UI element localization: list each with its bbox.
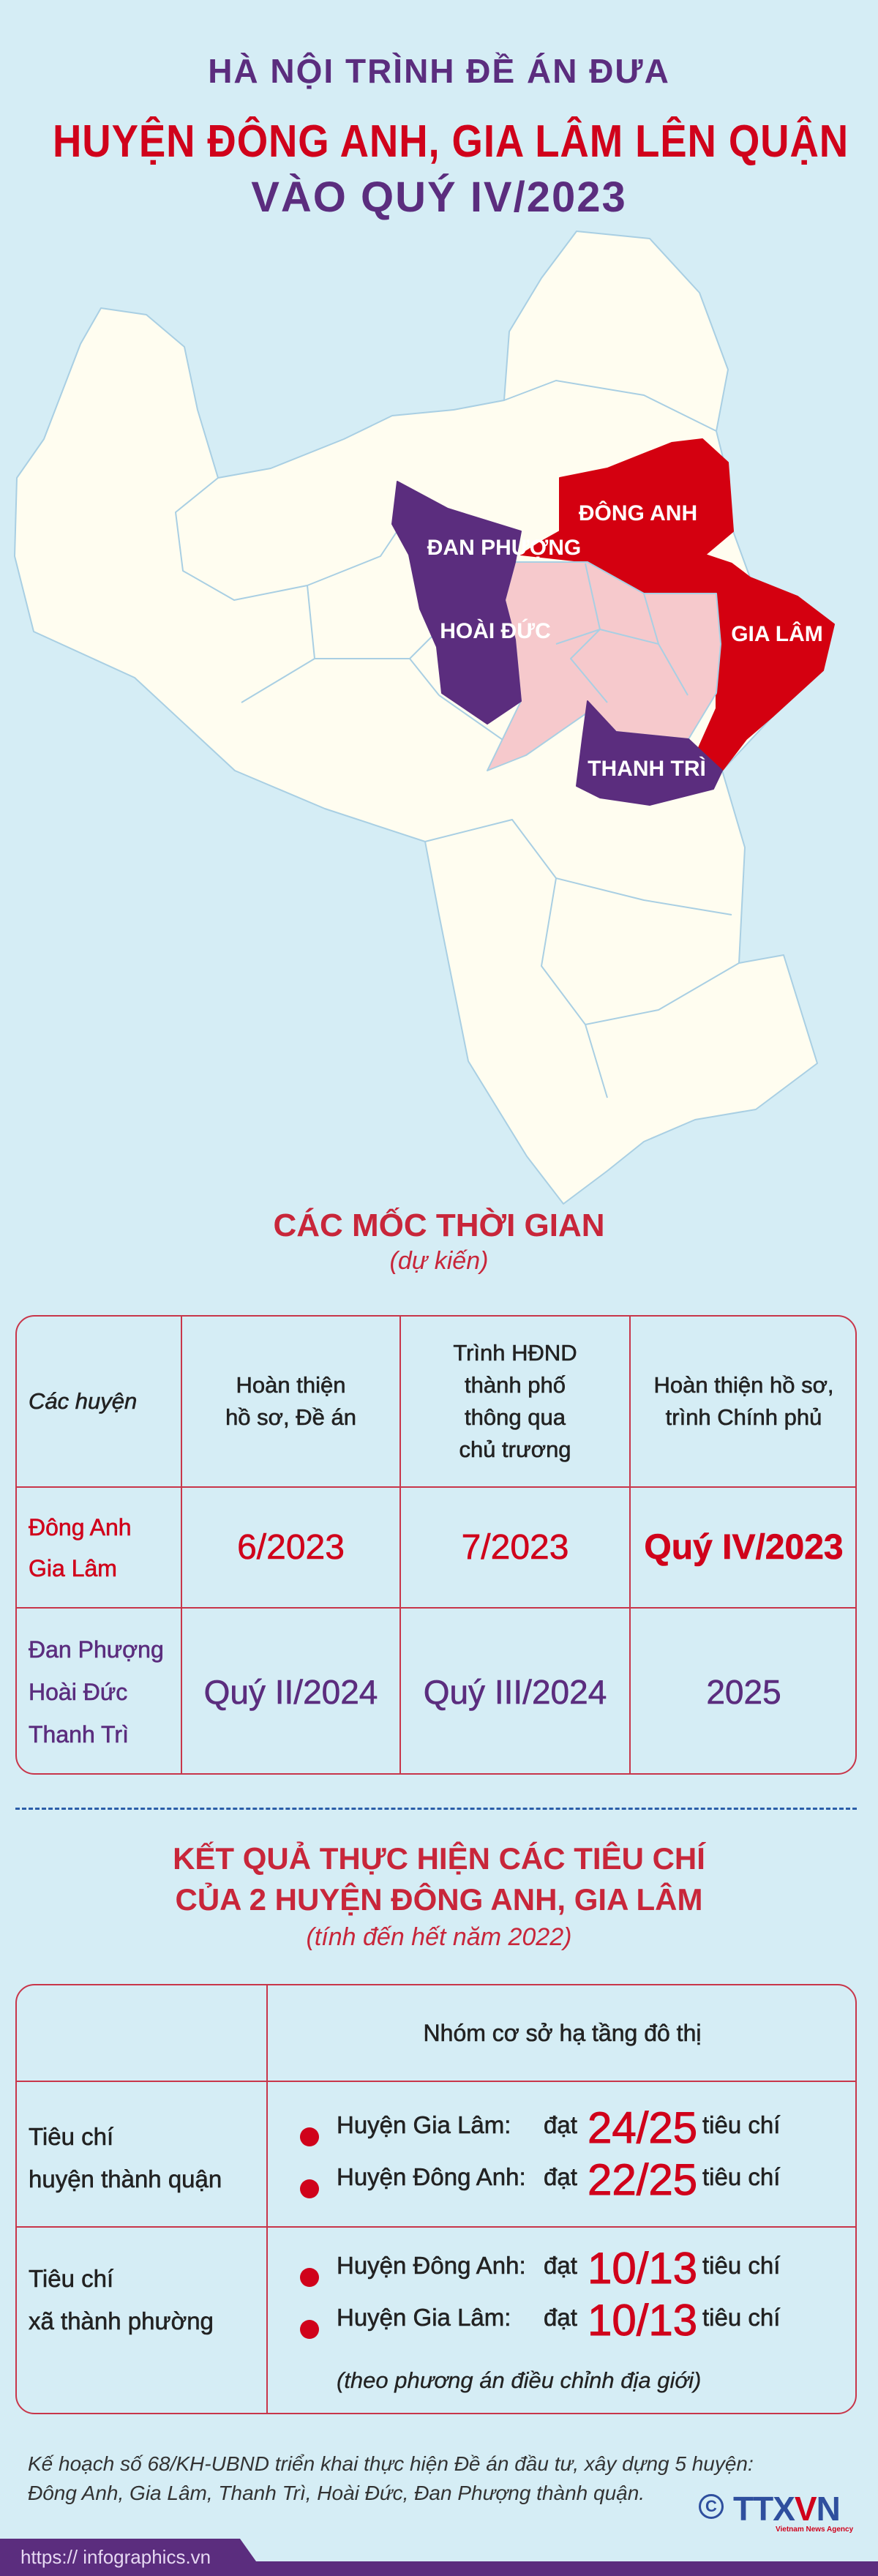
map labels: ĐÔNG ANH [579, 501, 697, 525]
title line 3: VÀO QUÝ IV/2023 [251, 173, 627, 221]
table: criteria results: đạt [544, 2111, 577, 2138]
table: milestones: chủ trương [459, 1437, 571, 1462]
map: inner city (pink) [487, 562, 721, 771]
logo: TTXVN: Vietnam News Agency [776, 2526, 853, 2534]
table: milestones: Hoàn thiện [236, 1372, 345, 1398]
logo: TTXVN: TTXVN [733, 2490, 840, 2528]
title line 2: HUYỆN ĐÔNG ANH, GIA LÂM LÊN QUẬN [53, 116, 849, 167]
table: milestones [15, 1315, 857, 1775]
table: criteria results: 24/25 [588, 2103, 697, 2152]
table: criteria results: 10/13 [588, 2244, 697, 2293]
footer bar [0, 2539, 878, 2576]
map [14, 231, 835, 1205]
title line 1: HÀ NỘI TRÌNH ĐỀ ÁN ĐƯA [208, 52, 670, 90]
table: criteria results: Huyện Đông Anh: [337, 2252, 526, 2279]
table: milestones: Quý III/2024 [424, 1673, 607, 1711]
row: commune criteria: xã thành phường [29, 2307, 214, 2334]
table: criteria results: đạt [544, 2252, 577, 2279]
table: milestones: thành phố [465, 1372, 566, 1398]
heading: results: CỦA 2 HUYỆN ĐÔNG ANH, GIA LÂM [175, 1882, 702, 1917]
table: criteria results: đạt [544, 2304, 577, 2331]
row: Dan Phuong, Hoai Duc, Thanh Tri: Đan Phượng [29, 1636, 164, 1663]
table: milestones: Hoàn thiện hồ sơ, [653, 1372, 834, 1398]
title [53, 52, 849, 221]
logo: TTXVN: C [705, 2497, 717, 2515]
row: district criteria [29, 2123, 222, 2193]
table: criteria results: tiêu chí [702, 2304, 780, 2331]
table: criteria results: Huyện Đông Anh: [337, 2163, 526, 2190]
table: milestones: 6/2023 [237, 1528, 345, 1567]
heading: milestones [273, 1208, 605, 1275]
map labels: HOÀI ĐỨC [440, 618, 551, 643]
table: milestones: hồ sơ, Đề án [225, 1404, 356, 1430]
table: milestones: Quý IV/2023 [644, 1528, 844, 1567]
table: milestones: Quý II/2024 [204, 1673, 378, 1711]
map: Dong Anh and Gia Lam (red) [521, 439, 834, 776]
row: Dong Anh, Gia Lam [28, 1513, 132, 1581]
map: Thanh Tri (purple) [577, 701, 722, 805]
logo: TTXVN [699, 2490, 853, 2534]
table: criteria results [15, 1984, 857, 2414]
footnote: Kế hoạch số 68/KH-UBND triển khai thực hiện Đề án đầu tư, xây dựng 5 huyện: [28, 2452, 754, 2475]
table: criteria results: tiêu chí [702, 2111, 780, 2138]
footnote: Đông Anh, Gia Lâm, Thanh Trì, Hoài Đức, Đan Phượng thành quận. [28, 2482, 645, 2504]
table: milestones: Trình HĐND [453, 1340, 577, 1366]
map labels: GIA LÂM [731, 621, 823, 646]
table: criteria results: Huyện Gia Lâm: [337, 2111, 511, 2138]
heading: milestones: CÁC MỐC THỜI GIAN [273, 1208, 605, 1243]
table: criteria results: tiêu chí [702, 2252, 780, 2279]
table: criteria results: đạt [544, 2163, 577, 2190]
row: commune criteria [28, 2265, 214, 2334]
map labels: ĐAN PHƯỢNG [427, 536, 581, 560]
table: criteria results: tiêu chí [702, 2163, 780, 2190]
map: Dan Phuong, Hoai Duc (purple) [392, 482, 521, 724]
table: milestones: trình Chính phủ [666, 1404, 822, 1430]
header cells: Các huyện [29, 1388, 137, 1414]
table: milestones: 2025 [706, 1673, 781, 1711]
row: district criteria: huyện thành quận [29, 2165, 222, 2193]
table: milestones: thông qua [465, 1404, 566, 1430]
heading: results: (tính đến hết năm 2022) [307, 1923, 571, 1951]
row: Dan Phuong, Hoai Duc, Thanh Tri: Thanh Trì [29, 1721, 129, 1748]
row: Dan Phuong, Hoai Duc, Thanh Tri [28, 1636, 164, 1748]
heading: milestones: (dự kiến) [390, 1247, 488, 1275]
row: Dong Anh, Gia Lam: Gia Lâm [29, 1554, 117, 1581]
map labels: THANH TRÌ [588, 756, 706, 781]
row: Dan Phuong, Hoai Duc, Thanh Tri: Hoài Đức [29, 1679, 127, 1705]
row: commune criteria: Tiêu chí [29, 2265, 113, 2292]
table: criteria results: (theo phương án điều chỉnh địa giới) [337, 2367, 701, 2393]
map: outline of Hanoi [15, 231, 834, 1204]
map labels [427, 501, 823, 781]
table: criteria results: 22/25 [588, 2155, 697, 2204]
heading: results: KẾT QUẢ THỰC HIỆN CÁC TIÊU CHÍ [173, 1841, 705, 1876]
table: criteria results: Huyện Gia Lâm: [337, 2304, 511, 2331]
footer url: https:// infographics.vn [20, 2546, 211, 2568]
header cell: Nhóm cơ sở hạ tầng đô thị [424, 2020, 701, 2046]
row: district criteria: Tiêu chí [29, 2123, 113, 2150]
footnote [28, 2452, 754, 2504]
table: milestones: 7/2023 [462, 1528, 569, 1567]
row: Dong Anh, Gia Lam: Đông Anh [29, 1513, 132, 1540]
table: criteria results: 10/13 [588, 2296, 697, 2345]
heading: results [173, 1841, 706, 1951]
